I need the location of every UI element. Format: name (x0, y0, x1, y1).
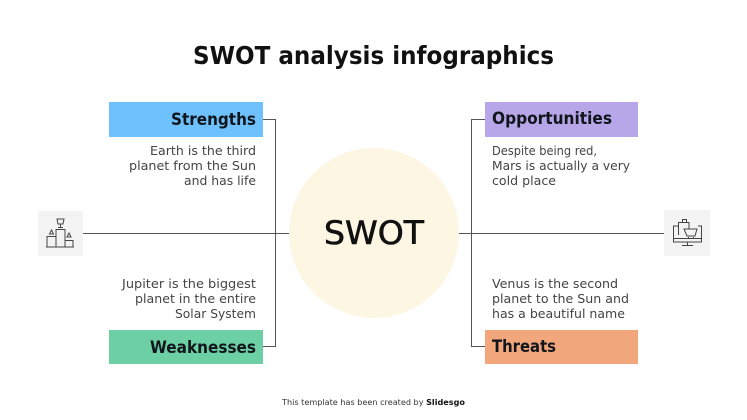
opportunities text (492, 144, 630, 188)
icon: podium with trophy (38, 211, 83, 256)
weaknesses text: Solar System (175, 307, 256, 321)
threats heading: Threats (492, 337, 556, 356)
strengths text: and has life (184, 174, 256, 188)
weaknesses heading (109, 330, 263, 364)
footer credit: This template has been created by Slidesgo (281, 398, 465, 407)
strengths text: Earth is the third (150, 144, 256, 158)
threats text: planet to the Sun and (492, 292, 629, 306)
center circle (289, 148, 459, 318)
threats heading (485, 330, 638, 364)
title: SWOT analysis infographics (193, 41, 554, 70)
panel: opportunities (485, 102, 638, 188)
opportunities heading: Opportunities (492, 109, 612, 128)
strengths heading (109, 102, 263, 137)
strengths heading: Strengths (171, 110, 256, 129)
opportunities heading (485, 102, 638, 137)
weaknesses text (121, 277, 256, 321)
weaknesses heading: Weaknesses (150, 338, 256, 357)
panel: strengths (109, 102, 263, 188)
threats text (492, 277, 629, 321)
weaknesses text: Jupiter is the biggest (121, 277, 256, 291)
threats text: has a beautiful name (492, 307, 625, 321)
center circle: SWOT (324, 214, 424, 252)
connector lines (83, 120, 664, 346)
weaknesses text: planet in the entire (135, 292, 256, 306)
strengths text: planet from the Sun (129, 159, 256, 173)
panel: threats (485, 277, 638, 364)
panel: weaknesses (109, 277, 263, 364)
opportunities text: Despite being red, (492, 144, 597, 158)
opportunities text: cold place (492, 174, 556, 188)
opportunities text: Mars is actually a very (492, 159, 630, 173)
icon: monitor with shopping bag and cart (664, 210, 710, 256)
strengths text (129, 144, 256, 188)
threats text: Venus is the second (492, 277, 618, 291)
